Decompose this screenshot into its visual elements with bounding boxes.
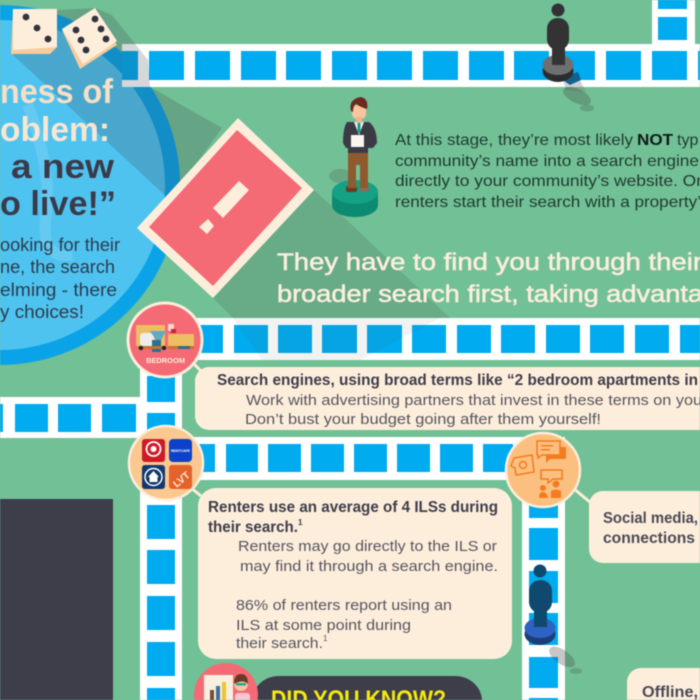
businessman pawn [329,97,378,217]
intro paragraph: renters start their search with a property’ [395,194,700,211]
blue pawn [524,564,582,674]
icon: blue listing app: RENTCAFE [171,448,190,453]
intro paragraph: NOT [637,132,673,149]
alert card [137,118,314,298]
callout: ILS usage [190,487,512,659]
intro paragraph: directly to your community’s website. Or [395,173,700,190]
trousers [348,148,368,188]
callout: search engines: Don’t bust your budget going after them yourself! [245,411,601,428]
bedroom token [128,303,202,377]
exclamation mark [199,181,249,234]
die two [62,8,117,69]
intro paragraph: community’s name into a search engine [395,153,699,170]
icon: red listing app [142,439,165,462]
circle body text: ooking for their [0,235,120,255]
jacket [343,122,377,153]
circle heading: oblem: [0,111,110,149]
icon: presenter [234,674,250,700]
long shadow from card [213,190,450,360]
green heading [277,249,700,308]
circle body text [0,235,120,322]
icon: orange listing app: LVT [171,470,192,490]
callout: ILS usage: their search. [236,635,323,652]
dice [11,8,117,69]
long shadow from dice [13,8,222,200]
icon: people [539,480,561,498]
green heading: They have to find you through their [277,249,700,276]
circle heading [0,73,116,223]
callout: ILS usage: ILS at some point during [236,617,411,634]
circle heading: a new [11,148,115,186]
callout: ILS usage: may find it through a search engine. [240,558,498,575]
intro paragraph: At this stage, they’re most likely [395,132,633,149]
intro paragraph: typ [677,132,698,149]
callout: search engines [192,362,700,430]
hair [350,97,367,112]
board track: lower horizontal and vertical [175,437,565,700]
callout: social media: Social media, [603,510,698,527]
social token [506,433,580,507]
callout: ILS usage: Renters may go directly to the ILS or [238,538,497,555]
paper [351,135,364,147]
board track: left horizontal and vertical [0,360,182,700]
green heading: broader search first, taking advanta [277,281,700,308]
circle heading: ness of [0,73,114,111]
callout: search engines: Work with advertising partners that invest in these terms on you [246,392,700,409]
ILS token [129,426,203,500]
circle body text: y choices! [0,302,84,322]
callout: search engines: Search engines, using broad terms like “2 bedroom apartments in [217,372,698,389]
intro paragraph [395,132,700,211]
die one [11,9,57,54]
board track: top [122,0,700,87]
circle body text: elming - there [0,280,117,300]
shoes [346,186,357,192]
board track: middle [165,318,700,360]
dark panel [0,499,113,700]
head [352,105,366,119]
callout: ILS usage: their search. [208,519,298,536]
circle heading: o live!” [0,185,116,223]
circle body text: ne, the search [0,257,115,277]
callout: ILS usage: 1 [298,518,303,527]
callout: social media: connections [603,530,695,547]
callout: ILS usage: 86% of renters report using an [236,597,452,614]
base [332,192,378,217]
callout: ILS usage: 1 [323,634,328,643]
blue circle panel [0,5,180,365]
icon: home listing app [142,465,165,489]
did you know banner [194,663,482,700]
icon: bed and dresser [136,324,194,352]
callout: social media [573,488,700,563]
bedroom token: BEDROOM [146,358,185,365]
callout: offline [627,668,700,700]
icon: chart panel [204,675,233,700]
black pawn [542,4,594,112]
callout: ILS usage: Renters use an average of 4 ILSs during [208,499,498,516]
shirt and tie [354,122,364,135]
icon: chat bubbles [511,441,566,483]
